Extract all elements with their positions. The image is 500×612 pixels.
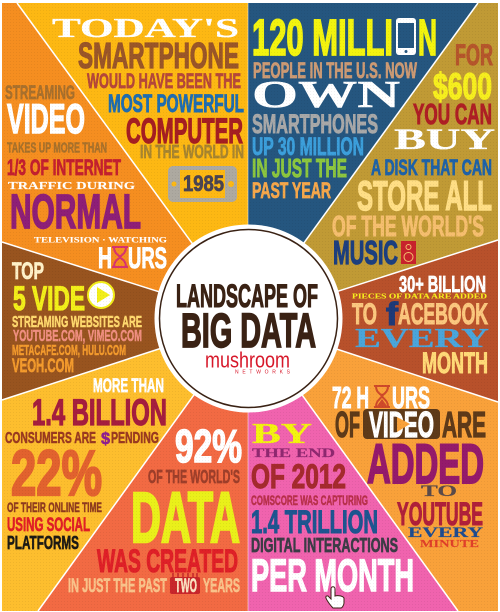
logo: mushroom networks: NETWORKS (235, 370, 291, 376)
icon: smartphone (396, 18, 416, 55)
text: 92%: 92% (175, 420, 242, 472)
text: top: TOP (12, 258, 44, 285)
text: 22%: 22% (11, 437, 102, 509)
text: normal: NORMAL (10, 186, 141, 239)
icon: hourglass (374, 386, 390, 407)
text: streaming websites are: STREAMING WEBSITES ARE (12, 314, 142, 331)
panel: 120 million (248, 3, 478, 320)
text: of video are: VIDEO (369, 404, 434, 445)
icon: play button (88, 282, 114, 308)
text: youtube, vimeo: YOUTUBE.COM, VIMEO.COM (13, 328, 142, 345)
text: 120 million: N (418, 9, 437, 66)
text: 72 hours: URS (392, 380, 430, 415)
text: consumers are spending: CONSUMERS ARE (5, 430, 96, 447)
panel: today's smartphone (17, 3, 248, 320)
text: platforms: PLATFORMS (7, 533, 79, 553)
text: own: OWN (252, 74, 400, 116)
heading: landscape of: LANDSCAPE OF (176, 278, 318, 314)
text: in just the: IN JUST THE (252, 153, 347, 183)
text: would have been the: WOULD HAVE BEEN THE (87, 70, 241, 93)
text: 1.4 trillion: 1.4 TRILLION (251, 504, 378, 540)
panel: facebook (248, 240, 498, 402)
text: television-watching: TELEVISION · WATCHING (34, 236, 167, 244)
text: video: VIDEO (7, 95, 85, 142)
text: smartphones: SMARTPHONES (252, 109, 378, 139)
text: to facebook (352, 296, 488, 332)
text: digital interactions: DIGITAL INTERACTIONS (251, 535, 398, 557)
panel: 1.4 billion consumers (2, 320, 248, 611)
icon: speaker (401, 241, 416, 264)
text: consumers are spending: $ (101, 429, 111, 448)
text: in the world in: IN THE WORLD IN (140, 142, 244, 162)
text: using social: USING SOCIAL (7, 515, 90, 536)
text: 120 million: 120 MILLI (252, 9, 393, 66)
text: metacafe, hulu: METACAFE.COM, HULU.COM (12, 342, 126, 359)
panel: youtube 72 hours (248, 320, 498, 611)
panel: per month (248, 320, 458, 611)
text: in just the past two years: IN JUST THE PAST (68, 576, 167, 597)
text: consumers are spending: PENDING (111, 430, 159, 447)
panel: 92% of data (38, 320, 248, 611)
text: in just the past two years: TWO (175, 576, 197, 597)
text: pieces of data are added: PIECES OF DATA ARE ADDED (352, 292, 487, 300)
text: minute: MINUTE (420, 538, 479, 550)
text: past year: PAST YEAR (252, 178, 331, 203)
text: data: DATA (131, 479, 240, 558)
panel: streaming video (2, 3, 248, 320)
panel: top 5 video (2, 242, 248, 400)
text: takes up more than: TAKES UP MORE THAN (7, 140, 107, 156)
text: veoh: VEOH.COM (12, 356, 74, 377)
text: more than: MORE THAN (93, 376, 164, 397)
icon: phone with 1985: 1985 (183, 171, 224, 196)
text: to: TO (421, 483, 457, 500)
text: up 30 million: UP 30 MILLION (252, 133, 364, 161)
heading: today's: TODAY'S (52, 13, 239, 43)
text: to facebook: f (386, 296, 398, 332)
text: hours (98, 242, 167, 275)
text: buy: BUY (394, 123, 496, 156)
text: by: BY (252, 418, 312, 450)
text: the end: THE END (252, 445, 335, 460)
icon: hourglass (112, 247, 128, 267)
text: in just the past two years: YEARS (203, 576, 240, 597)
text: traffic during: TRAFFIC DURING (8, 180, 136, 192)
text: smartphone: SMARTPHONE (78, 35, 239, 76)
icon: phone with 1985 (168, 166, 237, 202)
text: hours: H (98, 242, 112, 275)
text: 1/3 of internet: 1/3 OF INTERNET (7, 155, 121, 180)
text: 72 hours: 72 H (332, 380, 369, 415)
text: computer: COMPUTER (126, 112, 243, 151)
text: of their online time: OF THEIR ONLINE TIME (7, 499, 102, 515)
icon: hand cursor (326, 587, 344, 608)
text: every: EVERY (408, 525, 483, 541)
text: hours: URS (128, 242, 167, 275)
text: comscore was capturing: COMSCORE WAS CAPTURING (251, 492, 368, 508)
logo: mushroom networks: mushroom (205, 348, 290, 372)
text: 1.4 billion: 1.4 BILLION (32, 392, 167, 433)
panel: for $600 (248, 3, 498, 320)
text: of video are: OF (335, 404, 360, 445)
text: most powerful: MOST POWERFUL (108, 90, 244, 118)
text: every: EVERY (355, 323, 489, 353)
text: of the world's: OF THE WORLD'S (148, 467, 240, 487)
heading: big data: BIG DATA (181, 305, 316, 358)
text: of 2012: OF 2012 (251, 458, 346, 496)
text: 72 hours (332, 380, 430, 415)
text: 5 video: 5 VIDE (13, 280, 85, 318)
center circle: landscape of big data (154, 224, 342, 412)
text: to facebook: TO (352, 298, 377, 331)
text: streaming: STREAMING (5, 83, 75, 104)
text: music: MUSIC (333, 234, 398, 271)
text: was created: WAS CREATED (97, 543, 238, 579)
